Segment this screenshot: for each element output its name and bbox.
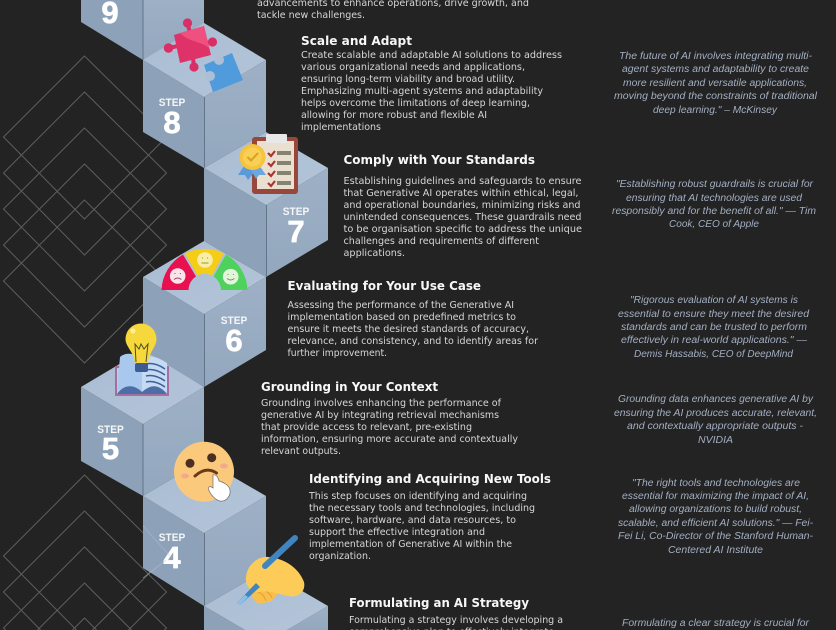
step 6 block: 6 [225,323,243,358]
text block: identifying and acquiring new tools: organization. [309,551,371,562]
step 7 block [204,132,328,277]
quote: Demis Hassabis: "Rigorous evaluation of AI systems is [630,295,798,306]
step 7 block: STEP [283,206,309,218]
quote: Demis Hassabis: standards and can be trusted to perform [621,322,807,333]
step 5 block: STEP [97,424,124,436]
text block: evaluating for your use case: Evaluating for Your Use Case [288,278,481,293]
text block: evaluating for your use case: implementation based on predefined metrics to [288,312,516,323]
text: intro of step 9 [257,0,529,21]
step 4 block: 4 [163,540,181,575]
text block: identifying and acquiring new tools: support the effective integration and [309,527,485,538]
step 3 block [204,570,328,630]
text block: identifying and acquiring new tools: implementation of Generative AI within the [309,539,512,550]
text block: scale and adapt: various organizational needs and applications, [301,62,525,73]
text block: scale and adapt: Scale and Adapt [301,33,412,48]
text block: comply with your standards: and operational boundaries, minimizing risks and [344,200,581,211]
text block: evaluating for your use case: Assessing the performance of the Generative AI [288,300,514,311]
text block: scale and adapt: allowing for more robust and flexible AI [301,110,487,121]
diamond pattern: lower [4,475,166,630]
text block: grounding in your context: relevant outputs. [261,446,341,457]
icon: book and light bulb [115,324,169,396]
text block: scale and adapt: Emphasizing multi-agent systems and adaptability [301,86,543,97]
quote: McKinsey: The future of AI involves integrating multi- [619,51,813,62]
quote: NVIDIA: NVIDIA [698,435,733,446]
quote: McKinsey [614,51,818,116]
quote: Demis Hassabis: effectively in real-world applications." — [621,335,807,346]
quote: Fei-Fei Li: essential for maximizing the impact of AI, [622,491,809,502]
quote: McKinsey: agent systems and adaptability to create [622,64,810,75]
quote: strategy: Formulating a clear strategy is crucial for [622,618,810,629]
step 7 block: 7 [287,214,305,249]
text block: evaluating for your use case: relevance, and consistency, and to identify areas for [288,336,538,347]
quote: Tim Cook: Cook, CEO of Apple [669,219,760,230]
quote: McKinsey: deep learning." – McKinsey [653,105,778,116]
text block: comply with your standards: to be organisation specific to address the unique [344,224,582,235]
quote: Fei-Fei Li: Centered AI Institute [668,545,764,556]
step 4 block [143,460,266,606]
icon: puzzle pieces [164,18,243,92]
quote: McKinsey: more resilient and versatile applications, [623,78,807,89]
text block: scale and adapt [301,33,562,133]
quote: Fei-Fei Li: "The right tools and technologies are [632,478,801,489]
text block: comply with your standards: Establishing guidelines and safeguards to ensure [344,176,582,187]
text block: identifying and acquiring new tools: software, hardware, and data resources, to [309,515,516,526]
text block: grounding in your context: Grounding involves enhancing the performance of [261,398,502,409]
quote: Tim Cook: ensuring that AI technologies are used [626,193,803,204]
quote: Tim Cook: "Establishing robust guardrails is crucial for [616,179,814,190]
quote: Fei-Fei Li: scalable, and efficient AI solutions." — Fei- [618,518,814,529]
quote: Fei-Fei Li [618,478,814,556]
text block: evaluating for your use case: further improvement. [288,348,387,359]
text block: comply with your standards: challenges and requirements of different [344,236,539,247]
text block: identifying and acquiring new tools: This step focuses on identifying and acquiring [308,491,527,502]
step 4 block: STEP [159,532,185,544]
text block: scale and adapt: helps overcome the limitations of deep learning, [301,98,530,109]
text block: scale and adapt: implementations [301,122,381,133]
text block: comply with your standards: applications. [344,248,405,259]
text block: scale and adapt: Create scalable and adaptable AI solutions to address [301,50,562,61]
step 9 block [81,0,204,61]
text block: formulating an AI strategy: Formulating a strategy involves developing a [349,615,563,626]
quote: Fei-Fei Li: allowing organizations to build robust, [629,504,802,515]
text block: formulating an AI strategy [349,595,563,630]
text block: grounding in your context: information, ensuring more accurate and contextually [261,434,518,445]
text block: comply with your standards: unintended consequences. These guardrails need [344,212,582,223]
text block: comply with your standards [344,152,582,259]
text block: grounding in your context: generative AI by integrating retrieval mechanisms [261,410,499,421]
icon: satisfaction gauge [162,249,248,290]
text block: comply with your standards: that Generative AI operates within ethical, legal, [344,188,579,199]
quote: Demis Hassabis [618,295,810,360]
step 5 block [81,350,204,496]
quote: McKinsey: moving beyond the constraints of traditional [614,91,818,102]
icon: checklist and medal [238,134,298,194]
text block: identifying and acquiring new tools [308,471,551,562]
text block: scale and adapt: ensuring long-term viability and broad utility. [301,74,515,85]
step 6 block: STEP [221,315,247,327]
step 5 block: 5 [102,431,119,466]
step 8 block [143,23,266,168]
quote: NVIDIA: Grounding data enhances generative AI by [618,394,814,405]
text block: grounding in your context: Grounding in Your Context [261,379,438,394]
quote: Demis Hassabis: essential to ensure they meet the desired [618,309,810,320]
quote: NVIDIA [614,394,817,446]
text block: evaluating for your use case: ensure it meets the desired standards of accuracy, [288,324,529,335]
text block: identifying and acquiring new tools: the necessary tools and technologies, including [309,503,535,514]
text block: comply with your standards: Comply with Your Standards [344,152,535,167]
quote: Fei-Fei Li: Fei Li, Co-Director of the Stanford Human- [618,531,814,542]
text: intro of step 9: tackle new challenges. [257,10,365,21]
icon: hand writing with pen [237,538,304,605]
diamond pattern: upper [4,56,166,363]
text block: evaluating for your use case [288,278,538,359]
step 6 block [143,241,266,387]
icon: thinking face [174,442,234,502]
text block: formulating an AI strategy: Formulating an AI Strategy [349,595,529,610]
text block: grounding in your context: that provide access to relevant, pre-existing [261,422,472,433]
quote: Tim Cook: responsibly and for the benefit of all." — Tim [612,206,816,217]
text block: grounding in your context [261,379,518,457]
quote: Demis Hassabis: Demis Hassabis, CEO of DeepMind [634,349,794,360]
step 8 block: 8 [163,105,181,140]
quote: NVIDIA: ensuring the AI produces accurate, relevant, [614,408,817,419]
text block: identifying and acquiring new tools: Identifying and Acquiring New Tools [309,471,551,486]
step 8 block: STEP [159,97,185,109]
quote: Tim Cook [612,179,816,230]
quote: NVIDIA: and contextually appropriate outputs - [627,421,804,432]
